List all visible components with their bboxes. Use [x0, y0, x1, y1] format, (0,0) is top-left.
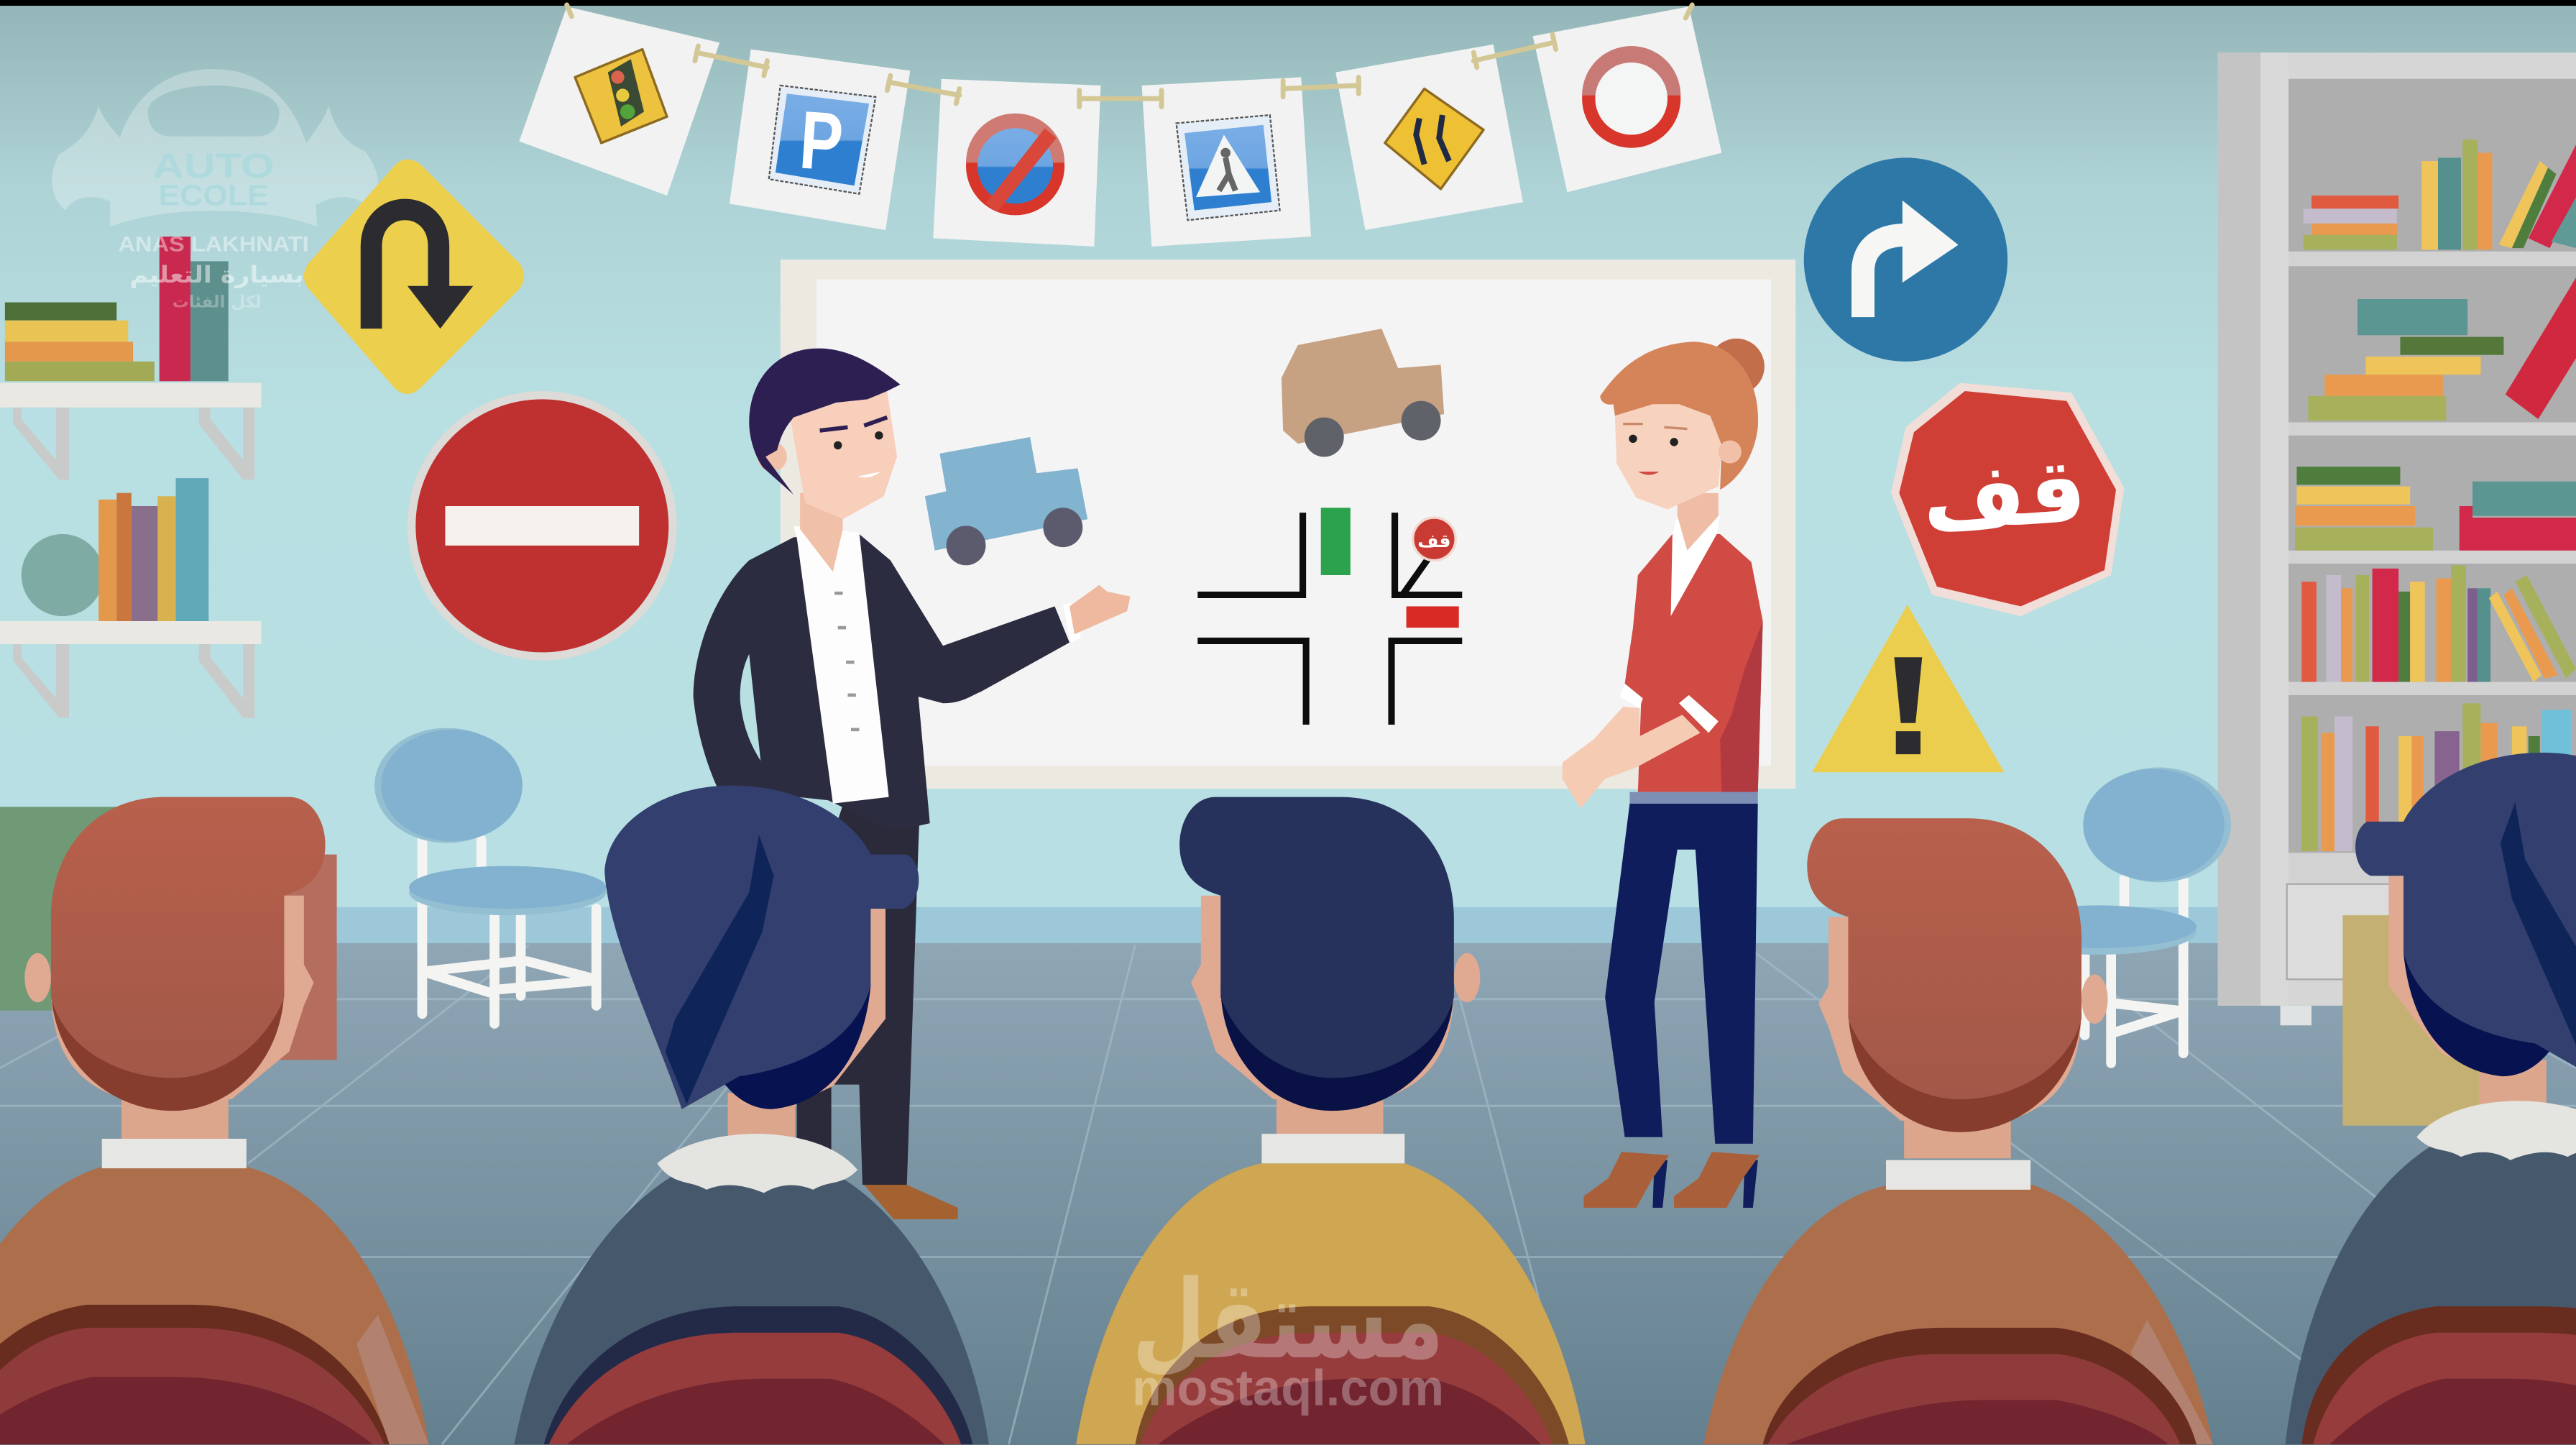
man head	[749, 349, 901, 572]
box: left green	[0, 807, 119, 1011]
watermark: mostaql: مستقل	[1132, 1257, 1444, 1383]
watermark: auto ecole logo: AUTO	[153, 147, 275, 185]
road intersection diagram: قف	[1417, 531, 1451, 551]
flag: no parking sign	[933, 79, 1100, 247]
woman top	[1625, 534, 1763, 792]
woman near cuff	[1679, 695, 1719, 733]
sign: warning triangle	[1812, 605, 2005, 772]
man legs	[797, 805, 920, 1185]
watermark: auto ecole logo: لكل الفئات	[172, 293, 262, 311]
books: fourth shelf	[2301, 565, 2576, 682]
books: left upper shelf	[5, 237, 229, 381]
books: left lower shelf	[22, 478, 208, 621]
flag: no entry ring sign	[1533, 6, 1721, 192]
sign: no entry	[408, 391, 677, 661]
right bookcase	[2218, 52, 2576, 1025]
wall background	[0, 5, 2576, 912]
sign: stop octagon	[1891, 383, 2124, 616]
chair: right	[2000, 767, 2231, 1063]
sign: u-turn diamond	[304, 160, 524, 394]
chair: left	[374, 728, 606, 1024]
watermark: auto ecole logo	[52, 69, 378, 311]
woman forearm and hands	[1563, 707, 1701, 809]
bunting strings	[567, 5, 1692, 107]
car: blue	[925, 437, 1087, 565]
books: fifth shelf	[2301, 703, 2571, 851]
books: third shelf	[2295, 467, 2576, 551]
woman far cuff	[1620, 684, 1643, 708]
watermark: auto ecole logo: بسيارة التعليم	[130, 261, 304, 288]
floor	[0, 943, 2576, 1445]
books: top shelf	[2304, 139, 2576, 249]
bunting of road signs	[519, 5, 1721, 247]
watermark: mostaql	[1132, 1257, 1444, 1416]
audience member 3	[1076, 797, 1586, 1444]
flag: parking sign	[730, 50, 910, 230]
watermark: auto ecole logo: ECOLE	[159, 179, 269, 212]
man cuff	[1063, 603, 1081, 643]
man shirt buttons	[834, 592, 859, 731]
top black bar	[0, 0, 2576, 6]
man shirt	[794, 526, 889, 804]
woman top shading	[1720, 621, 1763, 792]
box: left red-brown	[247, 855, 337, 1060]
sign: turn right	[1804, 157, 2007, 362]
man shoe	[864, 1185, 958, 1219]
man jacket	[694, 534, 1070, 832]
left shelves	[0, 237, 261, 718]
audience member 1	[0, 797, 429, 1444]
flag: parking sign: P	[797, 95, 846, 188]
man hand	[1070, 585, 1131, 634]
books: second shelf	[2308, 277, 2576, 421]
audience member 2	[514, 786, 989, 1444]
box: right tan	[2342, 915, 2483, 1126]
woman collar	[1671, 516, 1720, 616]
road intersection diagram	[1197, 508, 1462, 725]
whiteboard	[781, 260, 1795, 789]
watermark: auto ecole logo: ANAS LAKHNATI	[119, 233, 309, 257]
skirting band	[0, 907, 2576, 945]
audience member 4	[1703, 818, 2213, 1444]
watermark: mostaql: mostaql.com	[1132, 1359, 1444, 1416]
sign: stop octagon: قف	[1919, 439, 2089, 553]
audience member 5	[2285, 753, 2576, 1444]
man presenter	[694, 349, 1131, 1219]
woman trousers	[1605, 804, 1758, 1144]
flag: traffic light sign	[519, 6, 719, 196]
car: brown	[1282, 329, 1444, 457]
woman belt	[1629, 792, 1758, 804]
woman right shoe	[1674, 1152, 1760, 1208]
woman left shoe	[1583, 1152, 1669, 1208]
woman presenter	[1563, 339, 1765, 1208]
flag: pedestrian crossing sign	[1142, 77, 1311, 247]
flag: road narrows sign	[1335, 45, 1523, 230]
woman head	[1600, 339, 1765, 551]
